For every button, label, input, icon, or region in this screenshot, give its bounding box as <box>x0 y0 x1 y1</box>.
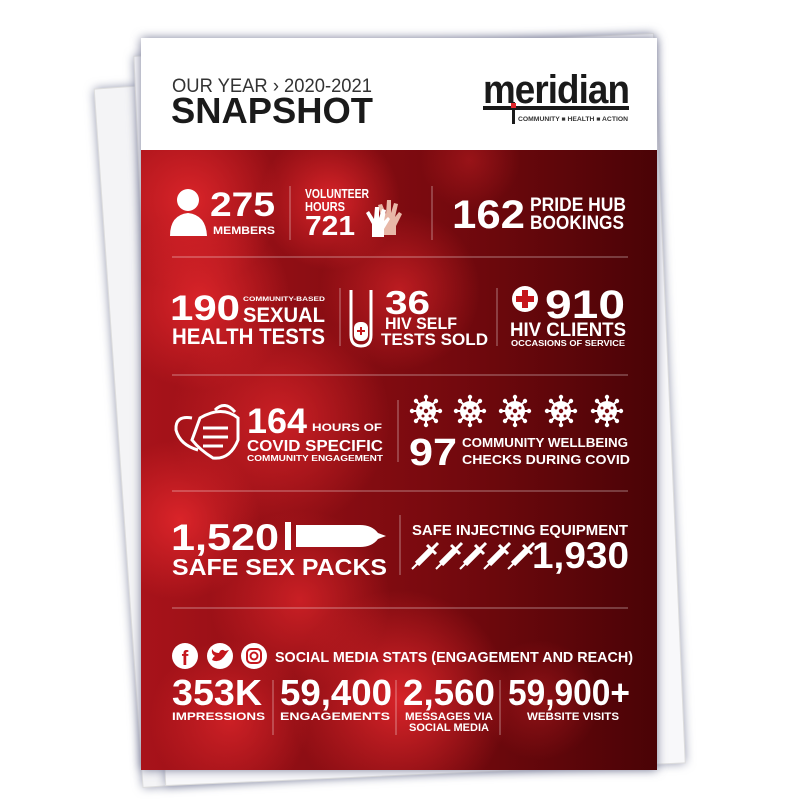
stat: engagements: ENGAGEMENTS <box>280 711 390 723</box>
row2: sexual health tests: SEXUAL <box>243 304 325 327</box>
row4: injecting equipment: 1,930 <box>532 535 629 576</box>
row2: hiv clients: HIV CLIENTS <box>510 320 626 341</box>
icons: facebook twitter instagram: f <box>182 648 189 670</box>
row4: injecting equipment: SAFE INJECTING EQUIPMENT <box>412 522 628 539</box>
icon: hands <box>366 200 402 237</box>
row2: hiv self tests <box>351 284 488 349</box>
icons: viruses <box>410 395 623 427</box>
stat: messages: 2,560 <box>403 672 495 713</box>
row1: volunteer hours: HOURS <box>305 199 345 214</box>
row3: covid hours: HOURS OF <box>312 422 382 434</box>
row4: safe sex packs: SAFE SEX PACKS <box>172 554 387 580</box>
stat: messages <box>403 672 495 734</box>
icon: person <box>170 189 207 236</box>
stat: impressions: IMPRESSIONS <box>172 711 265 723</box>
stat: impressions: 353K <box>172 672 262 713</box>
row1: pride hub bookings: BOOKINGS <box>530 213 624 234</box>
row3: covid hours: 164 <box>247 402 308 441</box>
row1: pride hub bookings: 162 <box>452 193 525 237</box>
logo: meridian: meridian <box>483 68 629 112</box>
row2: hiv self tests: HIV SELF <box>385 314 457 333</box>
logo: meridian: COMMUNITY ■ HEALTH ■ ACTION <box>518 116 628 123</box>
row1: members: MEMBERS <box>213 225 275 237</box>
icon: plus circle <box>512 286 538 312</box>
background pages <box>94 34 685 787</box>
row1: volunteer hours: VOLUNTEER <box>305 186 369 201</box>
social media header: SOCIAL MEDIA STATS (ENGAGEMENT AND REACH) <box>275 649 633 666</box>
stat: website visits: WEBSITE VISITS <box>527 711 619 723</box>
row1: members: 275 <box>210 186 275 224</box>
social media header <box>172 643 633 670</box>
icon: mask <box>176 405 238 458</box>
icon: condom <box>285 522 386 550</box>
row4: safe sex packs <box>171 517 387 580</box>
row2: hiv self tests: TESTS SOLD <box>381 330 488 349</box>
row2: hiv self tests: 36 <box>385 284 430 321</box>
row3: covid hours: COVID SPECIFIC <box>247 438 383 455</box>
row3: wellbeing checks: 97 <box>409 432 457 474</box>
row2: sexual health tests: 190 <box>170 289 240 328</box>
icons: facebook twitter instagram <box>172 643 267 670</box>
stat: messages: MESSAGES VIA <box>405 711 493 723</box>
row2: hiv clients: OCCASIONS OF SERVICE <box>511 339 626 348</box>
header title: SNAPSHOT <box>171 90 373 131</box>
row1: members <box>170 186 275 237</box>
row3: wellbeing checks <box>409 395 630 474</box>
row1: volunteer hours <box>305 186 402 241</box>
row3: covid hours: COMMUNITY ENGAGEMENT <box>247 454 383 463</box>
row2: sexual health tests <box>170 289 325 349</box>
row3: wellbeing checks: COMMUNITY WELLBEING <box>462 435 628 450</box>
header title: OUR YEAR › 2020-2021 <box>172 76 372 97</box>
row1: volunteer hours: 721 <box>305 210 355 241</box>
row2: hiv clients: 910 <box>545 283 625 327</box>
row1: pride hub bookings: PRIDE HUB <box>530 195 626 216</box>
row4: injecting equipment <box>412 522 629 576</box>
red panel background <box>141 150 657 770</box>
row4: safe sex packs: 1,520 <box>171 517 279 558</box>
stat: website visits: 59,900+ <box>508 672 630 713</box>
row3: covid hours <box>176 402 383 463</box>
icon: test tube <box>351 290 371 346</box>
main page <box>141 38 657 770</box>
stat: engagements: 59,400 <box>280 672 392 713</box>
icons: syringes <box>412 543 534 569</box>
row2: sexual health tests: COMMUNITY-BASED <box>243 296 325 303</box>
stat: messages: SOCIAL MEDIA <box>409 722 489 734</box>
row3: wellbeing checks: CHECKS DURING COVID <box>462 452 630 467</box>
row1: pride hub bookings <box>452 193 626 237</box>
row2: sexual health tests: HEALTH TESTS <box>172 324 325 349</box>
row2: hiv clients <box>510 283 626 348</box>
